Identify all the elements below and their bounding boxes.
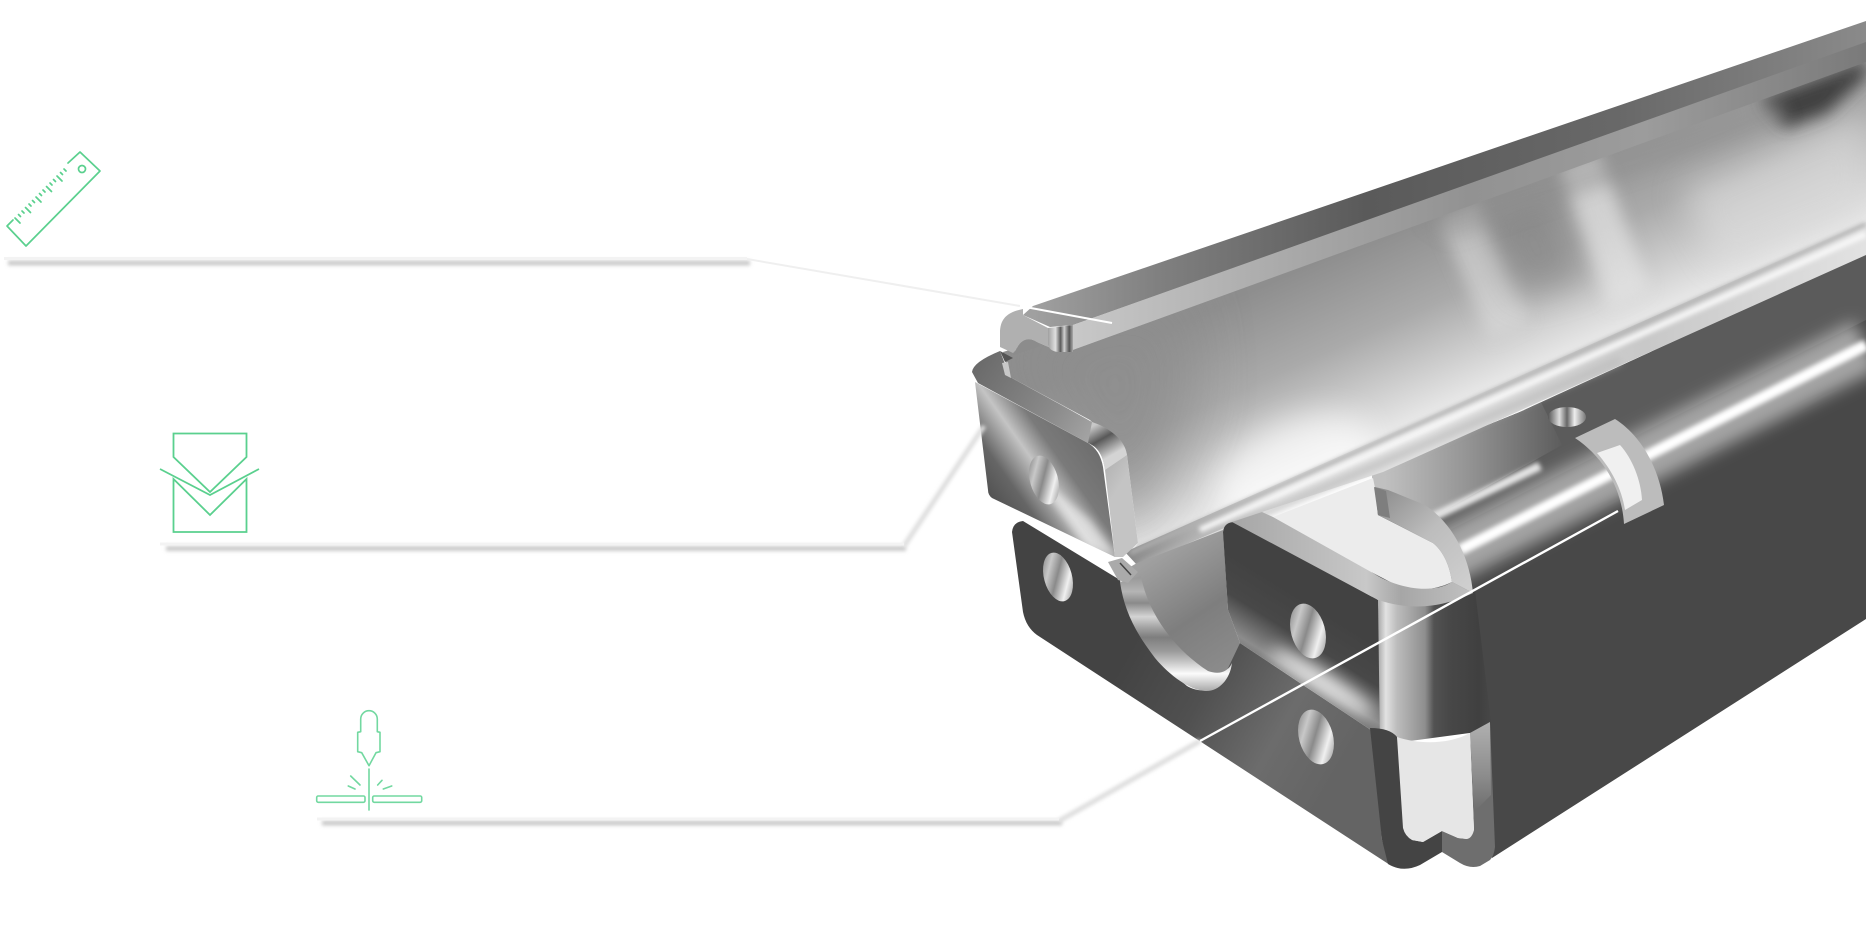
icon: press brake bending xyxy=(160,434,259,532)
leader line 1 xyxy=(4,258,1112,323)
bracket holes xyxy=(1038,549,1340,768)
tray interior xyxy=(1000,50,1866,570)
front cutout lower lip xyxy=(1370,728,1442,869)
front left tab xyxy=(972,351,1138,558)
leader line 3 xyxy=(317,511,1618,823)
icon: ruler xyxy=(7,152,100,246)
clip ring xyxy=(1575,419,1664,524)
front bracket glow xyxy=(1266,643,1378,721)
white opening xyxy=(1397,733,1474,842)
small top hole xyxy=(1548,407,1586,427)
light tab xyxy=(1232,478,1473,606)
inner side shade xyxy=(1470,722,1491,812)
metal part illustration xyxy=(972,21,1866,880)
front bracket face xyxy=(1223,522,1385,735)
body side face xyxy=(1370,240,1866,880)
top flange xyxy=(1023,21,1866,327)
lower bracket xyxy=(1012,521,1390,865)
bracket cutout inner face xyxy=(1125,530,1240,690)
rail highlight xyxy=(1125,222,1866,567)
inner lip xyxy=(1073,42,1866,351)
icon: laser cutting xyxy=(317,711,422,810)
vertical strip xyxy=(1378,590,1492,745)
bracket arc edge xyxy=(1120,576,1232,691)
top corner curl xyxy=(1000,309,1073,378)
leader line 2 xyxy=(160,426,984,548)
small joint piece xyxy=(1108,558,1138,583)
right front lip xyxy=(1442,722,1495,867)
